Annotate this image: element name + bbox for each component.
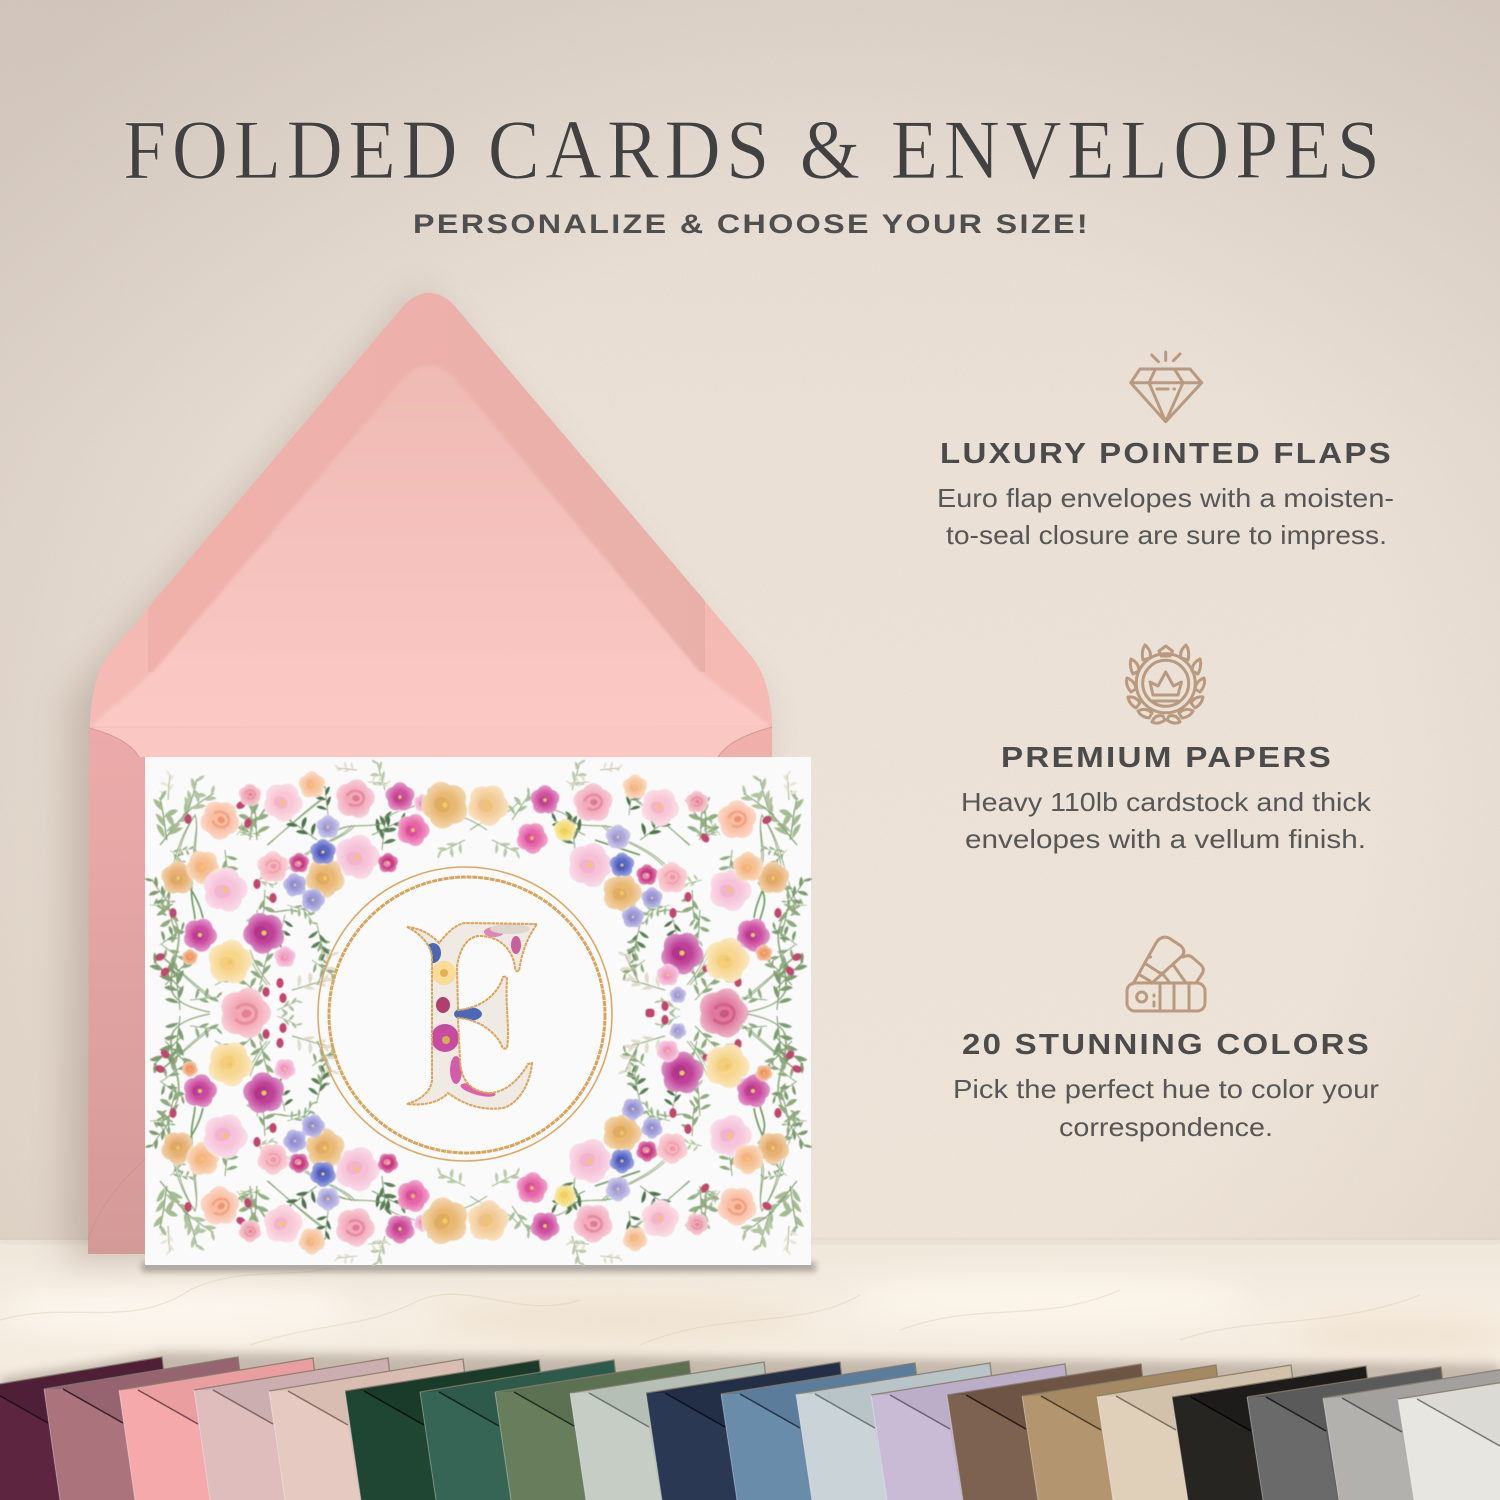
feature heading: luxury pointed flaps: LUXURY POINTED FLAPS bbox=[940, 438, 1393, 470]
envelope flap bbox=[90, 293, 772, 732]
swatch 15 tan bbox=[1022, 1365, 1234, 1500]
floral wreath bbox=[136, 755, 821, 1271]
swatch 2 mauve bbox=[44, 1357, 256, 1500]
swatch 3 pink bbox=[119, 1358, 331, 1500]
swatch 9 sage bbox=[570, 1362, 782, 1500]
subtitle: PERSONALIZE & CHOOSE YOUR SIZE! bbox=[413, 209, 1090, 239]
pink envelope bbox=[88, 293, 772, 1254]
swatch 1 burgundy bbox=[0, 1357, 180, 1500]
feature text: premium papers: envelopes with a vellum finish. bbox=[965, 824, 1366, 854]
swatch 11 dusty blue bbox=[721, 1363, 933, 1500]
colour envelope swatches bbox=[0, 1352, 1500, 1500]
swatch 13 lilac bbox=[871, 1364, 1083, 1500]
swatch 6 forest green bbox=[345, 1360, 557, 1500]
feature heading: 20 stunning colors: 20 STUNNING COLORS bbox=[962, 1029, 1371, 1061]
feature text: luxury pointed flaps bbox=[937, 483, 1394, 550]
feature heading: premium papers: PREMIUM PAPERS bbox=[1001, 742, 1333, 774]
envelope shadow bbox=[66, 290, 770, 1262]
envelope liner bbox=[90, 365, 772, 727]
feature text: luxury pointed flaps: to-seal closure are sure to impress. bbox=[946, 520, 1387, 550]
icon: crown badge bbox=[1126, 645, 1204, 723]
swatch 12 pale blue bbox=[796, 1363, 1008, 1500]
icon: colour swatch fan bbox=[1127, 937, 1205, 1011]
feature text: premium papers bbox=[961, 787, 1372, 854]
marble counter bbox=[0, 1239, 1500, 1500]
title: FOLDED CARDS & ENVELOPES bbox=[123, 102, 1380, 197]
swatch 4 blush bbox=[194, 1358, 406, 1500]
swatch 16 cream bbox=[1097, 1365, 1309, 1500]
icon: diamond bbox=[1131, 352, 1202, 422]
flap inner band bbox=[148, 293, 705, 672]
gold ring inner bbox=[329, 877, 605, 1153]
envelope body bbox=[88, 728, 146, 1254]
folded card bbox=[136, 755, 821, 1272]
feature text: 20 stunning colors: correspondence. bbox=[1059, 1112, 1273, 1142]
feature text: 20 stunning colors bbox=[953, 1074, 1379, 1142]
swatch 17 black bbox=[1172, 1366, 1384, 1500]
swatch 19 silver bbox=[1323, 1367, 1500, 1500]
swatch 7 teal bbox=[420, 1360, 632, 1500]
swatch 20 white bbox=[1398, 1368, 1500, 1500]
swatch 14 brown bbox=[947, 1364, 1159, 1500]
feature text: 20 stunning colors: Pick the perfect hue to color your bbox=[953, 1074, 1379, 1104]
swatch 8 olive bbox=[495, 1361, 707, 1500]
feature text: luxury pointed flaps: Euro flap envelopes with a moisten- bbox=[937, 483, 1394, 513]
monogram letter E bbox=[407, 923, 537, 1109]
swatch 5 rose beige bbox=[269, 1359, 481, 1500]
feature text: premium papers: Heavy 110lb cardstock and thick bbox=[961, 787, 1372, 817]
gold ring outer bbox=[318, 867, 612, 1161]
swatch 10 navy bbox=[646, 1362, 858, 1500]
swatch 18 charcoal bbox=[1247, 1367, 1459, 1500]
